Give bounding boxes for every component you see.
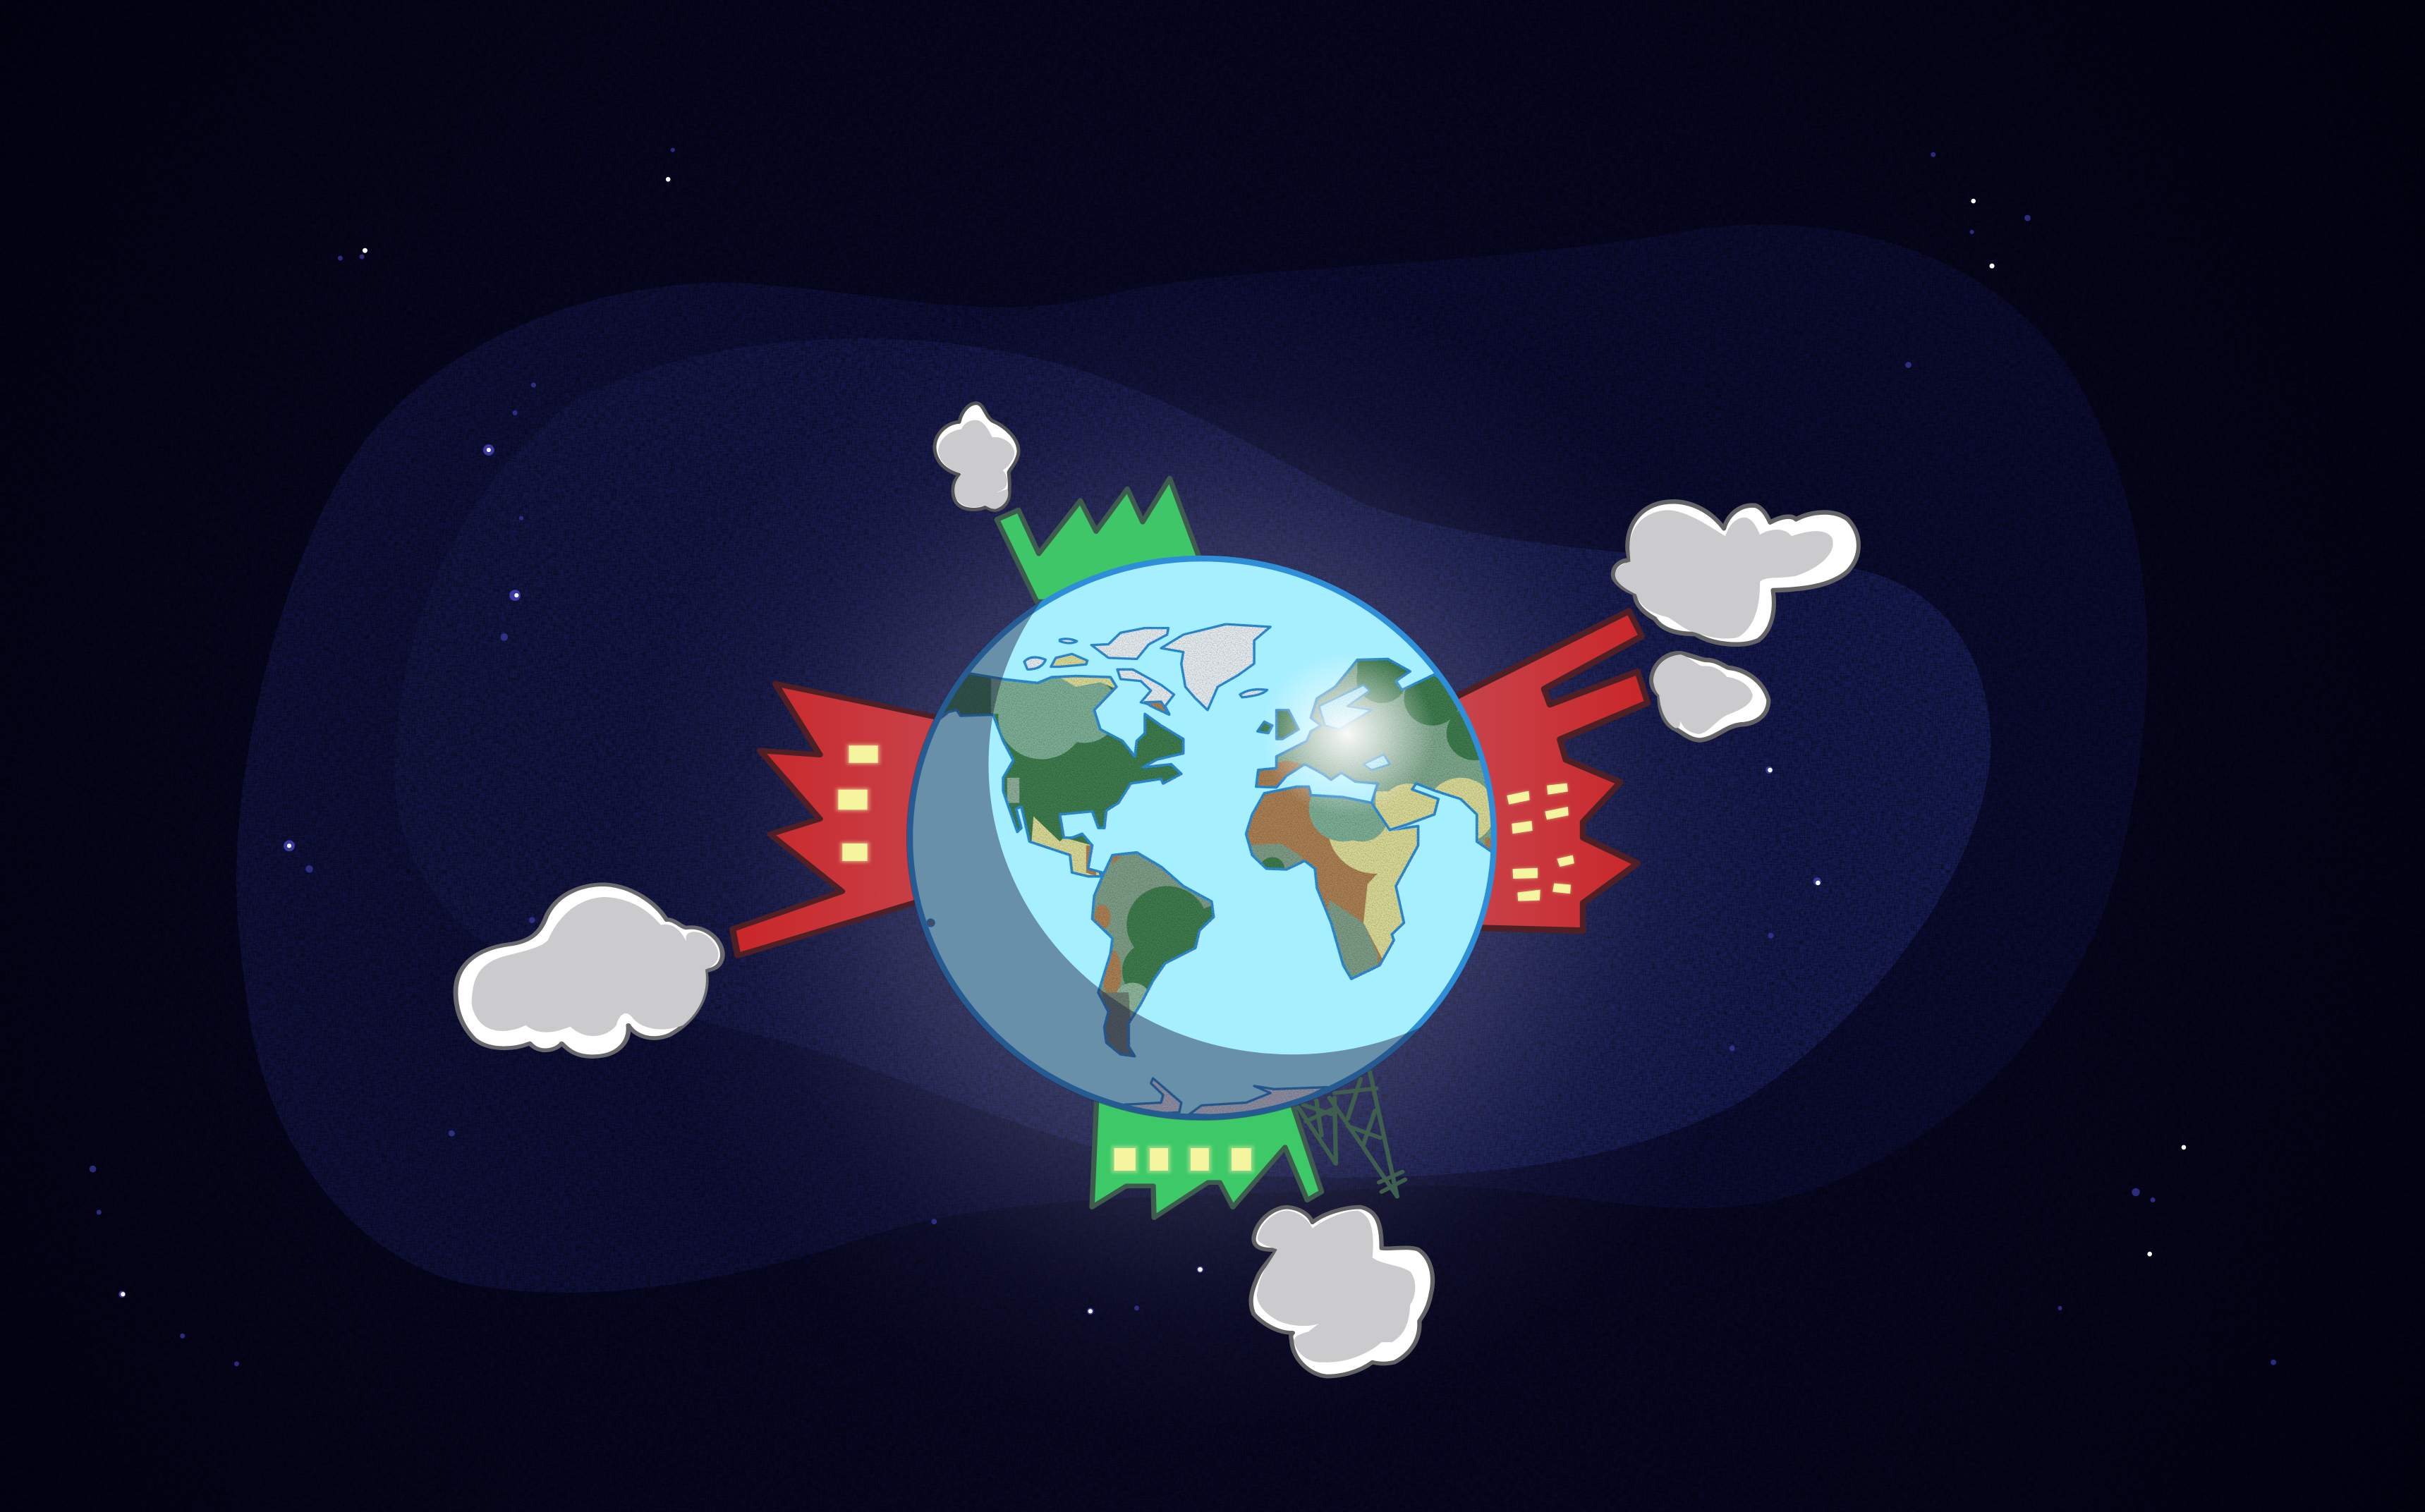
nebula: outer blob <box>236 225 2148 1293</box>
nebula: inner blob <box>394 339 1991 1178</box>
Eurasia <box>1256 655 1503 854</box>
bright white stars <box>121 177 2186 1313</box>
factory: red left <box>733 683 943 956</box>
ocean disc <box>908 557 1495 1118</box>
South America <box>1092 853 1217 1058</box>
Antarctica <box>1124 1078 1327 1116</box>
Africa <box>1246 776 1438 984</box>
window glow <box>1112 1146 1253 1173</box>
stars <box>90 148 2276 1366</box>
sunlight glare over Europe <box>1259 650 1435 817</box>
North America <box>936 673 1185 878</box>
dim purple stars <box>90 148 2276 1366</box>
lit windows <box>1507 784 1574 901</box>
Black Sea <box>1363 755 1390 770</box>
factory: green bottom <box>1092 1086 1322 1218</box>
smoke cloud: right large <box>1613 501 1859 645</box>
globe outline <box>910 559 1494 1117</box>
smoke cloud: right small <box>1651 653 1768 740</box>
pylon tower behind globe <box>1298 1072 1405 1197</box>
smoke cloud: bottom <box>1251 1207 1433 1377</box>
continents <box>927 624 1503 1116</box>
window glow <box>837 744 880 862</box>
United Kingdom and Ireland <box>1258 710 1299 739</box>
window glow <box>1507 784 1574 901</box>
halo stars <box>118 444 1821 1315</box>
smoke cloud: left <box>456 884 722 1056</box>
lit windows <box>1114 1148 1251 1171</box>
lit windows <box>838 745 878 861</box>
Greenland and Arctic islands <box>1024 624 1270 714</box>
factory: green top <box>997 478 1199 606</box>
factory: red right with chimneys <box>1456 611 1648 931</box>
small island <box>927 920 935 926</box>
Baltic Sea <box>1319 685 1372 729</box>
smoke cloud: top <box>935 403 1019 510</box>
night shadow crescent <box>896 475 1596 1135</box>
globe <box>906 556 1497 1121</box>
